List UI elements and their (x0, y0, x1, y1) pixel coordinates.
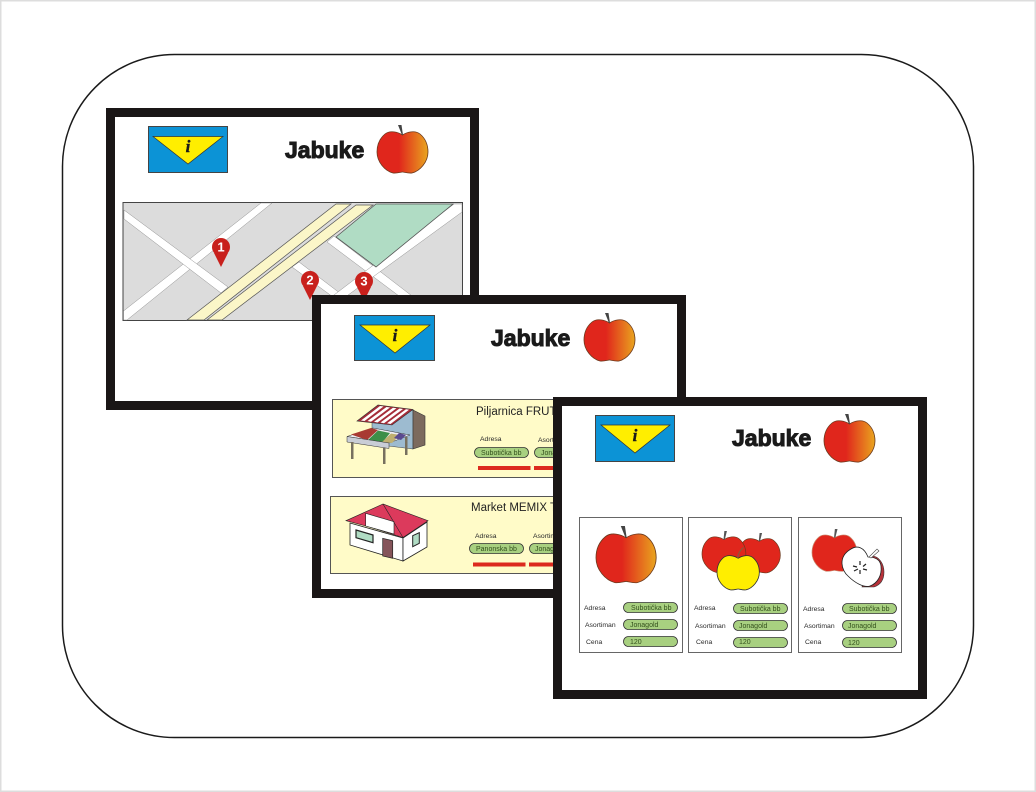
card: cut apple: Jonagold (848, 623, 877, 630)
icon: info logo: i (633, 426, 638, 445)
card: single apple: Adresa (584, 605, 606, 612)
icon: info logo: i (186, 137, 191, 156)
icon: map pin 3 (355, 272, 373, 301)
heading: Jabuke (732, 425, 811, 451)
card: cut apple: Subotička bb (849, 606, 890, 613)
card: cut apple: Asortiman (804, 623, 835, 630)
panel: market stall row (332, 400, 588, 478)
card: three apples: Adresa (694, 605, 716, 612)
card: cut apple: Adresa (803, 606, 825, 613)
card: cut apple (798, 518, 902, 652)
card: single apple: Cena (586, 639, 602, 646)
shop fields: Jonagold (541, 450, 570, 457)
icon: map pin 2: 2 (306, 272, 314, 288)
map (123, 202, 462, 320)
card: cut apple: Cena (805, 639, 821, 646)
icon: info logo (596, 416, 674, 462)
card: three apples: Asortiman (695, 623, 726, 630)
shop name: Market MEMIX T (471, 502, 557, 514)
shop fields: Adresa (475, 533, 497, 540)
icon: apple (824, 414, 875, 462)
heading: Jabuke (491, 325, 570, 351)
rounded outer frame (62, 54, 974, 738)
icon: house (346, 504, 428, 561)
icon: info logo (148, 126, 228, 172)
shop fields: Adresa (480, 436, 502, 443)
icon: info logo (354, 316, 434, 360)
icon: map pin 2 (301, 271, 319, 300)
shop fields: Asortiman (538, 437, 569, 444)
panel: shops window (316, 300, 682, 594)
shop fields (474, 436, 588, 470)
card: three apples (688, 518, 792, 652)
card: three apples: 120 (739, 639, 751, 646)
shop fields: Asortiman (533, 533, 564, 540)
panel: apples window (558, 402, 922, 694)
panel: market row (330, 496, 584, 574)
card: single apple: Jonagold (630, 622, 659, 629)
card: three apples: Subotička bb (740, 606, 781, 613)
card: single apple: 120 (630, 639, 642, 646)
shop fields: Subotička bb (481, 450, 522, 457)
card: single apple (580, 518, 682, 652)
card: three apples: Jonagold (739, 623, 768, 630)
icon: cut apple half (842, 547, 884, 587)
shop fields: Jonagold (535, 546, 564, 553)
shop name: Piljarnica FRUT (476, 406, 557, 418)
heading: Jabuke (285, 137, 364, 163)
icon: map pin 1: 1 (217, 240, 225, 254)
icon: apple (377, 125, 428, 173)
shop fields (470, 533, 584, 566)
icon: apple (596, 526, 656, 583)
icon: yellow apple (717, 548, 759, 590)
icon: market stall (347, 405, 425, 464)
icon: red apple (812, 529, 857, 571)
panel: map window (110, 112, 474, 406)
icon: apple (584, 313, 635, 361)
icon: map pin 3: 3 (360, 274, 368, 288)
icon: map pin 1 (212, 238, 230, 267)
icon: red apple back left (702, 531, 746, 572)
card: single apple: Asortiman (585, 622, 616, 629)
icon: info logo: i (393, 326, 398, 345)
card: three apples: Cena (696, 639, 712, 646)
shop fields: Panonska bb (476, 546, 517, 553)
icon: red apple back right (738, 533, 780, 573)
card: single apple: Subotička bb (631, 605, 672, 612)
card: cut apple: 120 (848, 640, 860, 647)
